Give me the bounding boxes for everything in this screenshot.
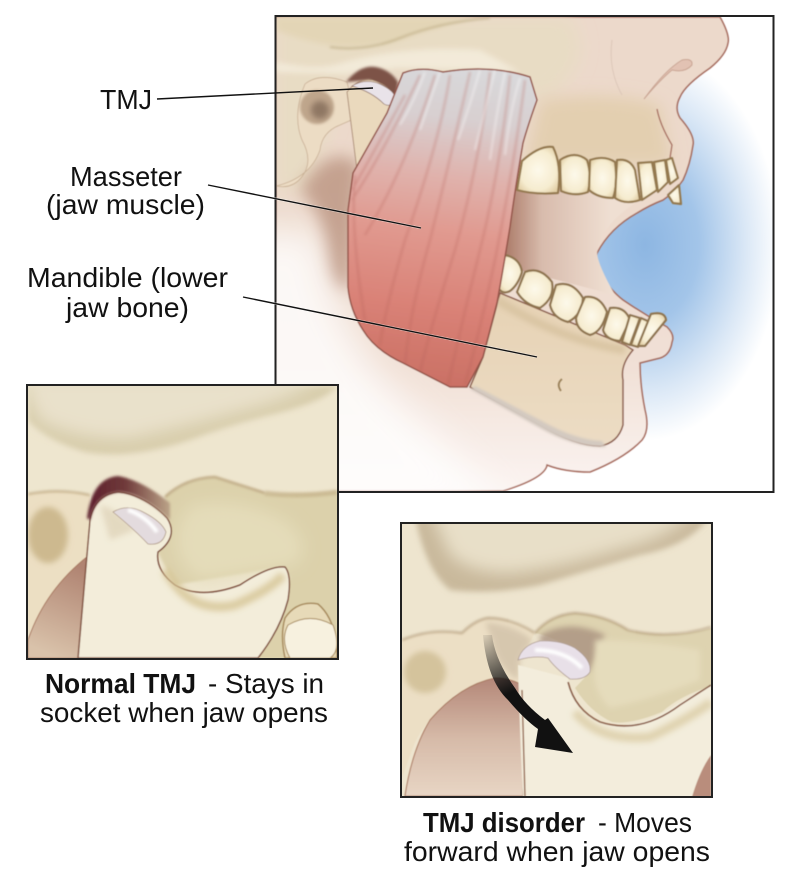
label: masseter	[46, 161, 205, 220]
fossa tan area	[158, 477, 345, 665]
mouth interior	[506, 190, 614, 292]
left bone	[402, 618, 535, 778]
label: masseter: Masseter	[70, 161, 182, 192]
temporal bone around ear	[276, 77, 356, 187]
upper skull shadow	[415, 515, 710, 592]
label: TMJ: TMJ	[100, 84, 152, 115]
lower jaw bone	[470, 293, 633, 446]
mandible	[518, 665, 715, 800]
caption: TMJ disorder: TMJ disorder	[423, 807, 585, 838]
caption: normal TMJ: Normal TMJ	[45, 668, 196, 699]
caption: normal TMJ: socket when jaw opens	[40, 697, 328, 728]
label: mandible: Mandible (lower	[27, 262, 228, 293]
tooth	[282, 603, 337, 658]
label: mandible: jaw bone)	[65, 292, 189, 323]
upper teeth	[517, 147, 681, 204]
disorder panel border	[401, 523, 712, 797]
caption: TMJ disorder	[404, 807, 710, 867]
leader line: mandible	[243, 297, 537, 357]
pink arch	[405, 678, 523, 796]
panel: TMJ disorder detail	[401, 510, 715, 800]
left bone with ear canal	[28, 491, 90, 635]
upper jaw bone	[525, 96, 672, 165]
caption: normal TMJ: - Stays in	[208, 668, 324, 699]
caption: TMJ disorder: forward when jaw opens	[404, 836, 710, 867]
movement arrow	[483, 635, 573, 753]
caption: TMJ disorder: - Moves	[598, 807, 692, 838]
label: mandible	[27, 262, 228, 323]
socket shadow	[87, 476, 170, 520]
masseter muscle	[348, 69, 537, 387]
label: masseter: (jaw muscle)	[46, 189, 205, 220]
displaced condyle cartilage	[518, 641, 590, 679]
main panel border	[276, 16, 774, 492]
lower teeth	[498, 255, 666, 347]
leader line: masseter	[208, 185, 421, 228]
ridge and fossa	[535, 613, 715, 723]
caption: normal TMJ	[40, 668, 328, 728]
condyle cartilage	[352, 81, 395, 105]
jaw socket	[345, 64, 400, 94]
normal panel border	[27, 385, 338, 659]
panel: jaw side view	[240, 16, 774, 510]
upper skull shadow	[28, 386, 337, 454]
leader line: TMJ	[157, 88, 373, 99]
panel: normal TMJ detail	[20, 376, 345, 665]
blue background glow	[596, 78, 772, 430]
mandible	[78, 492, 289, 658]
nostril	[644, 60, 692, 99]
face skin	[276, 17, 728, 491]
shadow beside jaw	[300, 157, 360, 290]
mental foramen	[559, 379, 562, 391]
pink shadow	[28, 556, 88, 658]
ramus of mandible	[346, 79, 388, 166]
cartilage	[113, 508, 166, 544]
skull upper bone	[276, 17, 581, 190]
